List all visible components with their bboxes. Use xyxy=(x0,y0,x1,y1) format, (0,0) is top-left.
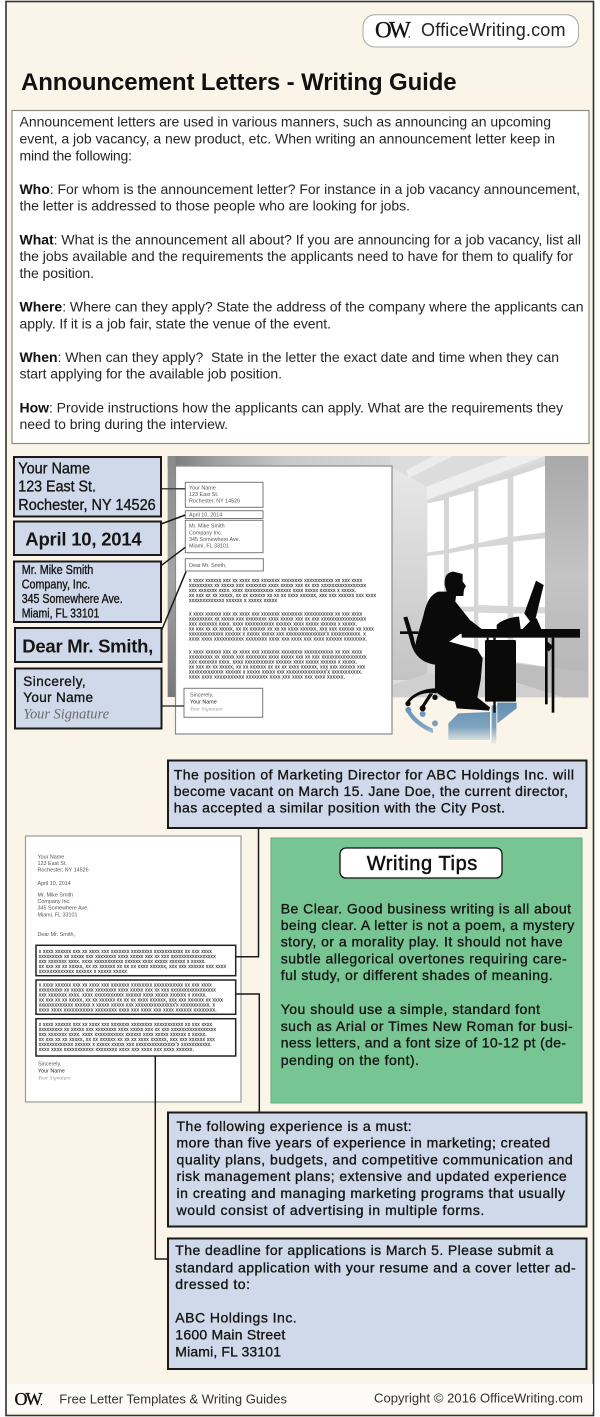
highlighted paragraph 3: x xxxx xxxxxx xxx xx xxxx xxx xxxxxxx xxxxxxxx xxxxxxxxxxx xx xxx xxxx xyxy=(39,1022,213,1028)
highlighted paragraph 3: xxxx xxxx xxxxxxxxxxx xxxxxxxx xxxx xxx xxxx xxx xxxx xxxxxx. xyxy=(39,1047,194,1053)
letter recipient block: Mr. Mike Smith xyxy=(189,524,225,530)
letter body placeholder text: x xxxx xxxxxx xxx xx xxxx xxx xxxxxxx xxxxxxxx xxxxxxxxxxx xx xxx xxxx xyxy=(189,650,362,656)
letter body placeholder text: x xxxx xxxxxx xxx xx xxxx xxx xxxxxxx xxxxxxxx xxxxxxxxxxx xx xxx xxxx xyxy=(189,578,362,584)
highlighted paragraph 1: x xxxx xxxxxx xxx xx xxxx xxx xxxxxxx xxxxxxxx xxxxxxxxxxx xx xxx xxxx xyxy=(39,949,212,955)
highlighted paragraph 3: xxxxxxxxxxxxx xxxxxx x xxxxx xxxxx xxx xxxxxxxxxxxxxxx'x xxxxxxxxxxx. xyxy=(39,1042,212,1048)
sample letter with highlighted paragraphs: Dear Mr. Smith, xyxy=(38,932,75,938)
letter salutation block: Dear Mr. Smith, xyxy=(189,563,227,569)
label: salutation xyxy=(15,628,162,662)
sample letter with highlighted paragraphs: Your Name xyxy=(38,1069,65,1075)
label: sender address: Rochester, NY 14526 xyxy=(18,497,156,514)
letter body placeholder text: xxxx xxxx xxxxxxxxxxx xxxxxxxx xxxx xxx xxxx xxx xxxx xxxxxx xxxxxxxx. xyxy=(189,636,367,642)
panel: writing tips xyxy=(271,838,582,1103)
callout: deadline paragraph xyxy=(168,1238,586,1369)
tips text: such as Arial or Times New Roman for busi- xyxy=(281,1018,573,1034)
letter body placeholder text: xx xxx xx xx xxxxx, xx xx xxxxxx xx xx xx xxxx xxxxxx, xxx xxx xxxxxx xxx xyxy=(189,664,366,670)
sample letter with highlighted paragraphs: Sincerely, xyxy=(38,1062,62,1068)
letter closing block: Sincerely, xyxy=(190,693,214,699)
letter body placeholder text: xx xxx xx xx xxxxx, xx xx xxxxxx xx xx xx xxxx xxxxxx, xxx xxx xxxxxx xxx xxxx xyxy=(189,593,376,599)
heading: writing tips xyxy=(340,848,502,878)
letter recipient block: 345 Somewhere Ave. xyxy=(189,537,240,543)
letter body placeholder text: x xxxx xxxxxx xxx xx xxxx xxx xxxxxxx xxxxxxxx xxxxxxxxxxx xx xxx xxxx xyxy=(189,612,362,618)
letter recipient block xyxy=(185,520,263,553)
label: recipient address: 345 Somewhere Ave. xyxy=(22,592,123,606)
panel: introduction: start applying for the available job position. xyxy=(20,366,282,382)
letter closing block: Your Signature xyxy=(190,706,223,712)
callout: experience paragraph: risk management plans; extensive and updated experience xyxy=(176,1168,567,1184)
footer: OW. xyxy=(14,1389,42,1409)
connector lines: paragraphs to explanation boxes xyxy=(155,828,259,1259)
letter body placeholder text: xxxxxxxxx xx xxxxx xxx xxxxxxxx xxxx xxxxx xxx xx xxx xxxxxxxxxxxxxxxxx xyxy=(189,616,366,622)
highlighted paragraph 3: xx xxx xx xx xxxxx, xx xx xxxxxx xx xx xx xxxx xxxxxx, xxx xxx xxxxxx xxx xyxy=(39,1037,215,1043)
logo badge xyxy=(363,15,578,47)
sample letter with highlighted paragraphs: Your Signature xyxy=(38,1076,71,1082)
letter closing block xyxy=(184,688,263,717)
sample letter with highlighted paragraphs: 123 East St. xyxy=(38,861,67,867)
highlighted paragraph 1: xx xxx xx xx xxxxx, xx xx xxxxxx xx xx xx xxxx xxxxxx, xxx xxx xxxxxx xxx xxxx xyxy=(39,964,227,970)
letter sender block: 123 East St. xyxy=(189,492,218,498)
letter sender block xyxy=(185,482,263,507)
highlighted paragraph 2 xyxy=(36,980,236,1014)
panel: introduction: What: What is the announcement all about? If you are announcing for a job vacancy, list all xyxy=(20,231,581,247)
label: recipient address: Company, Inc. xyxy=(22,578,90,592)
panel: introduction: event, a job vacancy, a new product, etc. When writing an announcement letter keep in xyxy=(20,130,555,146)
sample letter with highlighted paragraphs xyxy=(26,836,241,1102)
letter body placeholder text: xxxxxxxxxxxxx xxxxxx x xxxxx xxxxx xxx xxxxxxxxxxxxxxx'x xxxxxxxxxxx. x xyxy=(189,632,366,638)
highlighted paragraph 1: xxxxxxxxx xx xxxxx xxx xxxxxxxx xxxx xxxxx xxx xx xxx xxxxxxxxxxxxxxxxx xyxy=(39,954,216,960)
sample letter with highlighted paragraphs: Your Name xyxy=(38,854,64,860)
photo: office background xyxy=(168,456,588,697)
highlighted paragraph 2: xxx xxxxxxx xxxx. xxxx xxxxxxxxxxx xxxxxx xxxx xxxxx xxxxxx x xxxxx. xyxy=(39,992,207,998)
footer xyxy=(7,1384,593,1412)
callout: opening paragraph xyxy=(168,760,586,828)
callout: experience paragraph: more than five years of experience in marketing; created xyxy=(176,1135,550,1151)
label: sender address: Your Name xyxy=(18,460,90,477)
tips text: Be Clear. Good business writing is all about xyxy=(281,900,571,916)
logo badge: OW. xyxy=(375,18,411,42)
panel: introduction: Announcement letters are used in various manners, such as announcing an upcoming xyxy=(20,114,551,130)
tips text: You should use a simple, standard font xyxy=(281,1001,540,1017)
label: sender address: 123 East St. xyxy=(18,479,96,496)
highlighted paragraph 1: xxxxxxxxxxxxx xxxxxx x xxxxx xxxxx xyxy=(39,969,127,975)
letter recipient block: Miami, FL 33101 xyxy=(189,544,229,550)
label: date xyxy=(14,522,161,555)
letter date block: April 10, 2014 xyxy=(189,513,222,519)
highlighted paragraph 2: x xxxx xxxxxx xxx xx xxxx xxx xxxxxxx xxxxxxxx xxxxxxxxxxx xx xxx xxxx xyxy=(39,982,212,988)
panel: introduction: apply. If it is a job fair, state the venue of the event. xyxy=(20,315,331,331)
tips text: ful study, or different shades of meaning. xyxy=(281,967,553,983)
sample letter with highlighted paragraphs: Mr. Mike Smith xyxy=(38,892,73,898)
callout: experience paragraph: quality plans, budgets, and competitive communication and xyxy=(176,1151,573,1167)
logo badge: OfficeWriting.com xyxy=(421,20,566,40)
sample letter with highlighted paragraphs: Company Inc. xyxy=(38,899,71,905)
letter salutation block xyxy=(185,559,263,571)
letter sender block: Your Name xyxy=(189,485,216,491)
panel: introduction: How: Provide instructions how the applicants can apply. What are the requirements they xyxy=(20,399,563,415)
label: closing and signature xyxy=(15,668,162,728)
panel: introduction: mind the following: xyxy=(20,147,132,163)
sample letter with highlighted paragraphs: Rochester, NY 14526 xyxy=(38,868,89,874)
letter diagram: annotated letter xyxy=(176,466,392,734)
callout: opening paragraph: has accepted a similar position with the City Post. xyxy=(174,800,505,816)
highlighted paragraph 1 xyxy=(36,945,236,976)
callout: deadline paragraph: 1600 Main Street xyxy=(175,1326,285,1342)
letter date block xyxy=(185,511,263,519)
label: closing and signature: Your Signature xyxy=(23,706,110,722)
letter body placeholder text: xx xxx xx xx xxxxx, xx xx xxxxxx xx xx xx xxxx xxxxxx, xxx xxx xxxxxx xx xxxx xyxy=(189,626,374,632)
illustration: reflection on floor xyxy=(405,703,517,745)
label: salutation: Dear Mr. Smith, xyxy=(22,635,153,656)
highlighted paragraph 3: xxxxxxxxx xx xxxxx xxx xxxxxxxx xxxx xxxxx xxx xx xxx xxxxxxxxxxxxxxxxx xyxy=(39,1027,217,1033)
callout: experience paragraph: in creating and managing marketing programs that usually xyxy=(176,1185,565,1201)
letter body placeholder text: xxx xxxxxxx xxxx. xxxx xxxxxxxxxxx xxxxxx xxxx xxxxx xxxxxx x xxxxx. xyxy=(189,660,357,666)
connector lines: labels to letter xyxy=(161,489,186,706)
highlighted paragraph 1: xxx xxxxxxx xxxx. xxxx xxxxxxxxxxx xxxxxx xxxx xxxxx xxxxxx x xxxxx. xyxy=(39,959,206,965)
callout: experience paragraph: The following experience is a must: xyxy=(176,1118,412,1134)
sample letter with highlighted paragraphs: April 10, 2014 xyxy=(38,881,71,887)
letter recipient block: Company Inc. xyxy=(189,530,222,536)
letter body placeholder text: xxxxxxxxxxxxx xxxxxx x xxxxx xxxxx xyxy=(189,598,278,604)
heading: writing tips: Writing Tips xyxy=(367,853,477,875)
tips text: being clear. A letter is not a poem, a mystery xyxy=(281,917,574,933)
letter closing block: Your Name xyxy=(190,699,217,705)
letter body placeholder text: xxxxxxxxx xx xxxxx xxx xxxxxxxx xxxx xxxxx xxx xx xxx xxxxxxxxxxxxxxxxx xyxy=(189,583,366,589)
label: recipient address: Miami, FL 33101 xyxy=(22,606,99,620)
label: recipient address: Mr. Mike Smith xyxy=(22,563,93,577)
panel: introduction: need to bring during the interview. xyxy=(20,416,228,432)
tips text: ness letters, and a font size of 10-12 pt (de- xyxy=(281,1035,566,1051)
letter body placeholder text: xxxxxxxxx xx xxxxx xxx xxxxxxxx xxxx xxxxx xxx xx xxx xxxxxxxxxxxxxxxxx xyxy=(189,654,367,660)
callout: opening paragraph: The position of Marketing Director for ABC Holdings Inc. will xyxy=(174,766,574,782)
highlighted paragraph 2: xx xxx xx xx xxxxx, xx xx xxxxxx xx xx xx xxxx xxxxxx, xxx xxx xxxxxx xx xxxx xyxy=(39,998,223,1004)
label: sender address xyxy=(14,457,161,516)
callout: deadline paragraph: Miami, FL 33101 xyxy=(175,1344,281,1360)
illustration: silhouette of person at desk xyxy=(400,572,580,713)
highlighted paragraph 2: xxxxxxxxxxxxx xxxxxx x xxxxx xxxxx xxx xxxxxxxxxxxxxxx'x xxxxxxxxxxx. x xyxy=(39,1002,216,1008)
highlighted paragraph 2: xxxx xxxx xxxxxxxxxxx xxxxxxxx xxxx xxx xxxx xxx xxxx xxxxxx xxxxxxxx. xyxy=(39,1008,217,1014)
label: date: April 10, 2014 xyxy=(25,529,142,550)
footer: Free Letter Templates & Writing Guides xyxy=(59,1392,287,1407)
label: recipient address xyxy=(14,562,161,622)
highlighted paragraph 3 xyxy=(36,1019,236,1056)
tips text: subtle allegorical overtones requiring care- xyxy=(281,950,567,966)
tips text: pending on the font). xyxy=(281,1052,419,1068)
letter body placeholder text: xxx xxxxxxx xxxx. xxxx xxxxxxxxxxx xxxxxx xxxx xxxxx xxxxxx x xxxxx. xyxy=(189,588,356,594)
tips text xyxy=(281,900,574,1068)
callout: deadline paragraph: ABC Holdings Inc. xyxy=(175,1309,297,1325)
callout: deadline paragraph: standard application with your resume and a cover letter ad- xyxy=(175,1259,576,1275)
highlighted paragraph 2: xxxxxxxxx xx xxxxx xxx xxxxxxxx xxxx xxxxx xxx xx xxx xxxxxxxxxxxxxxxxx xyxy=(39,988,216,994)
panel: introduction: When: When can they apply? State in the letter the exact date and time when they can xyxy=(20,349,559,365)
panel: introduction xyxy=(12,110,589,444)
letter body placeholder text: xxxx xxxx xxxxxxxxxxx xxxxxxxx xxxx xxx xxxx xxx xxxx xxxxxx. xyxy=(189,674,345,680)
tips text: story, or a morality play. It should not have xyxy=(281,934,563,950)
callout: deadline paragraph: dressed to: xyxy=(175,1276,250,1292)
panel: introduction: the jobs available and the requirements the applicants need to have for them to qualify for xyxy=(20,248,573,264)
panel: introduction: Who: For whom is the announcement letter? For instance in a job vacancy announcement, xyxy=(20,181,580,197)
panel: introduction: the letter is addressed to those people who are looking for jobs. xyxy=(20,198,410,214)
sample letter with highlighted paragraphs: Miami, FL 33101 xyxy=(38,912,77,918)
callout: experience paragraph xyxy=(168,1112,586,1226)
letter body placeholder text: xxx xxxxxxx xxxx. xxxx xxxxxxxxxxx xxxxxx xxxx xxxxx xxxxxx x xxxxx. xyxy=(189,622,357,628)
label: closing and signature: Your Name xyxy=(23,690,93,705)
panel: introduction: the position. xyxy=(20,265,94,281)
callout: experience paragraph: would consist of advertising in multiple forms. xyxy=(176,1202,484,1218)
letter sender block: Rochester, NY 14526 xyxy=(189,499,240,505)
sample letter with highlighted paragraphs: 345 Somewhere Ave. xyxy=(38,906,89,912)
callout: opening paragraph: become vacant on March 15. Jane Doe, the current director, xyxy=(174,783,568,799)
highlighted paragraph 3: xxx xxxxxxx xxxx. xxxx xxxxxxxxxxx xxxxxx xxxx xxxxx xxxxxx x xxxxx. xyxy=(39,1032,207,1038)
letter body placeholder text: xxxxxxxxxxxxx xxxxxx x xxxxx xxxxx xxx xxxxxxxxxxxxxxx'x xxxxxxxxxxx. xyxy=(189,670,362,676)
label: closing and signature: Sincerely, xyxy=(23,674,86,689)
panel: introduction: Where: Where can they apply? State the address of the company where the applicants can xyxy=(20,298,584,314)
letter body placeholder text xyxy=(189,578,376,680)
footer: Copyright © 2016 OfficeWriting.com xyxy=(374,1391,583,1406)
callout: deadline paragraph: The deadline for applications is March 5. Please submit a xyxy=(175,1242,554,1258)
title: Announcement Letters - Writing Guide xyxy=(21,69,457,96)
